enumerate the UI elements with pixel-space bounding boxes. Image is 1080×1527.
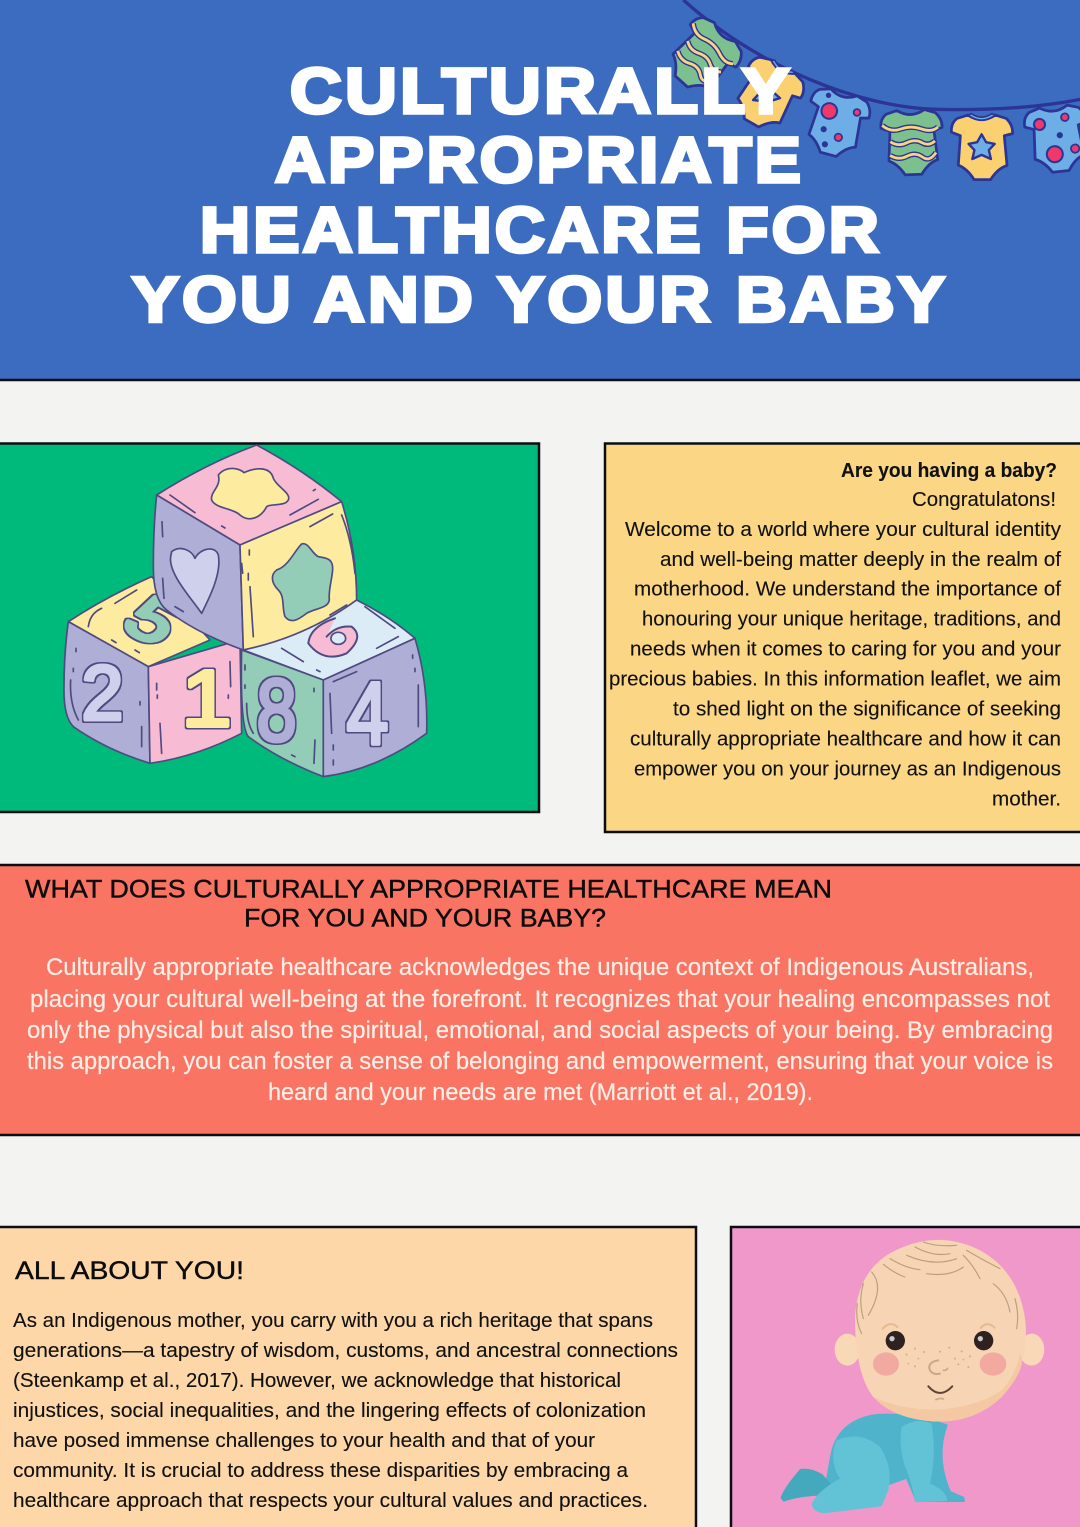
panel: what culturally appropriate healthcare means (0, 865, 1080, 1135)
text: definition paragraph (27, 954, 1053, 1106)
text: welcome paragraph: precious babies. In this information leaflet, we aim (609, 668, 1061, 690)
panel: building blocks illustration (0, 444, 539, 812)
icon: crawling baby (782, 1240, 1044, 1513)
heading: ALL ABOUT YOU! (15, 1257, 244, 1285)
text: heritage paragraph: generations—a tapestry of wisdom, customs, and ancestral connections (13, 1339, 678, 1362)
text: heritage paragraph: have posed immense challenges to your health and that of your (13, 1429, 595, 1452)
heading (25, 876, 832, 932)
heading: WHAT DOES CULTURALLY APPROPRIATE HEALTHCARE MEAN (25, 876, 832, 904)
icon: bunting of baby onesies (658, 0, 1080, 180)
title: APPROPRIATE (275, 124, 804, 196)
title: YOU AND YOUR BABY (132, 264, 948, 336)
text: definition paragraph: only the physical but also the spiritual, emotional, and social aspects of your being. By embracing (27, 1017, 1053, 1044)
numerals: 5 (109, 584, 197, 658)
top cube (157, 445, 342, 545)
panel: welcome message (605, 444, 1080, 832)
text: welcome paragraph: empower you on your journey as an Indigenous (634, 758, 1061, 780)
text: welcome paragraph (609, 488, 1062, 810)
text: welcome paragraph: honouring your unique heritage, traditions, and (642, 608, 1061, 630)
title: CULTURALLY (290, 55, 793, 127)
title: HEALTHCARE FOR (200, 194, 882, 266)
text: welcome paragraph: to shed light on the significance of seeking (673, 698, 1061, 720)
text: heritage paragraph: (Steenkamp et al., 2017). However, we acknowledge that historical (13, 1369, 621, 1392)
panel: baby illustration (731, 1227, 1080, 1527)
text: heritage paragraph: community. It is crucial to address these disparities by embracing a (13, 1459, 629, 1482)
text: welcome paragraph: mother. (992, 788, 1061, 810)
text: definition paragraph: heard and your needs are met (Marriott et al., 2019). (268, 1079, 813, 1106)
text: heritage paragraph: As an Indigenous mother, you carry with you a rich heritage that spans (13, 1309, 653, 1332)
text: heritage paragraph: healthcare approach that respects your cultural values and practices. (13, 1489, 648, 1512)
text: definition paragraph: placing your cultural well-being at the forefront. It recognizes that your healing encompasses not (30, 986, 1050, 1013)
text: welcome paragraph: motherhood. We understand the importance of (634, 578, 1061, 600)
text: welcome paragraph: Congratulatons! (912, 488, 1056, 511)
text: are you having a baby: Are you having a baby? (841, 459, 1057, 482)
text: heritage paragraph: injustices, social inequalities, and the lingering effects of colonization (13, 1399, 646, 1422)
icon: stacked toy blocks (64, 445, 427, 777)
title (132, 55, 948, 336)
text: welcome paragraph: needs when it comes to caring for you and your (630, 638, 1061, 660)
numerals: 8 (257, 661, 297, 760)
panel: all about you (0, 1227, 696, 1527)
text: welcome paragraph: and well-being matter deeply in the realm of (660, 548, 1061, 571)
text: heritage paragraph (13, 1309, 678, 1512)
numerals: 2 (82, 651, 123, 736)
text: definition paragraph: Culturally appropriate healthcare acknowledges the unique context of Indigenous Australians, (46, 954, 1034, 981)
numerals: 4 (347, 664, 388, 763)
panel: header banner (0, 0, 1080, 380)
text: welcome paragraph: Welcome to a world where your cultural identity (625, 518, 1062, 541)
heading: FOR YOU AND YOUR BABY? (244, 904, 606, 932)
text: definition paragraph: this approach, you can foster a sense of belonging and empowerment, ensuring that your voice is (27, 1048, 1053, 1075)
numerals: 1 (182, 654, 232, 743)
numerals (82, 584, 388, 763)
text: welcome paragraph: culturally appropriate healthcare and how it can (630, 728, 1061, 750)
